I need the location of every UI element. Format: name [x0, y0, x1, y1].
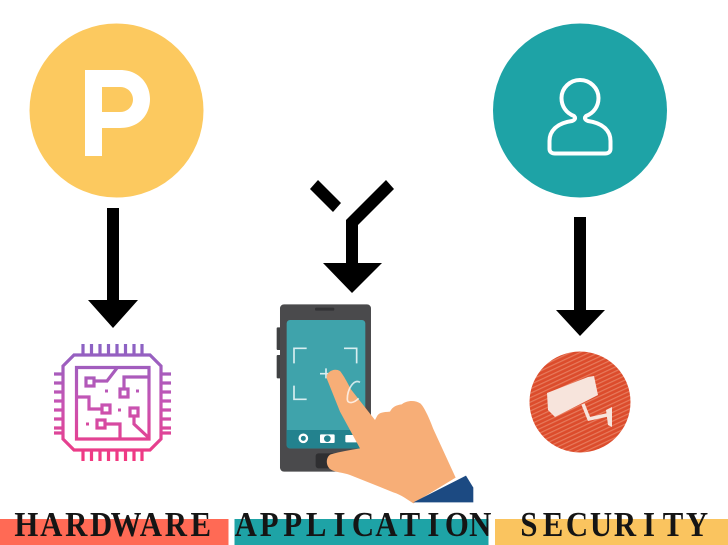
icon: phone with hand	[277, 304, 473, 503]
watermark	[347, 382, 360, 403]
phone screen	[287, 320, 365, 448]
phone body	[280, 304, 371, 472]
icon: yellow circle with letter P	[30, 24, 204, 198]
phone speaker	[315, 308, 334, 311]
label bar: application	[234, 519, 488, 545]
phone side buttons	[277, 327, 281, 378]
label: SECURITY: SECURITY	[520, 506, 708, 544]
arrow: middle merging	[310, 180, 394, 293]
hand	[327, 370, 456, 503]
sleeve	[413, 476, 473, 502]
phone bottom bar	[287, 430, 365, 448]
icon: security camera badge	[530, 352, 630, 452]
arrow: left	[88, 208, 138, 328]
viewfinder corners	[294, 348, 357, 399]
arrow: right	[556, 217, 605, 336]
phone home button	[316, 453, 336, 468]
icon: teal circle with person outline	[493, 24, 667, 198]
icon: circuit chip	[54, 344, 171, 461]
label bar: security	[495, 519, 728, 545]
label: HARDWARE: HARDWARE	[14, 506, 211, 544]
label bar: hardware	[0, 519, 228, 545]
camera controls	[300, 434, 357, 443]
label: APPLICATION: APPLICATION	[235, 506, 492, 544]
